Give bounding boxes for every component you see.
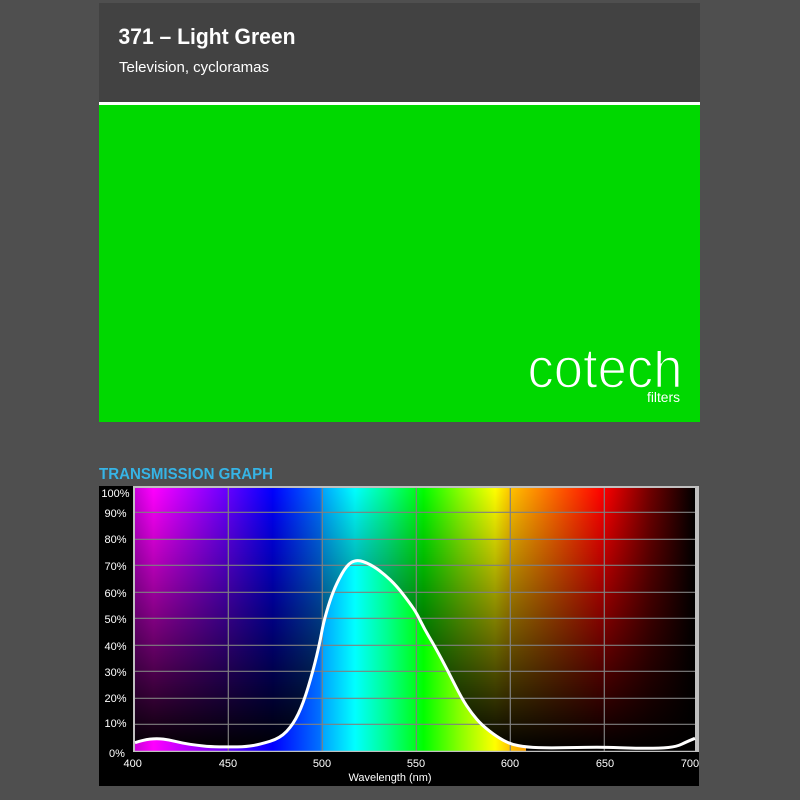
x axis labels: 600 bbox=[501, 758, 519, 770]
chart frame bbox=[133, 486, 699, 752]
logo: cotech filters: filters bbox=[647, 390, 680, 405]
y axis labels: 20% bbox=[104, 693, 127, 705]
title: 371 – Light Green bbox=[118, 24, 296, 49]
y axis labels: 0% bbox=[109, 748, 125, 760]
transmitted colour area under curve bbox=[135, 562, 526, 751]
header panel bbox=[99, 3, 700, 102]
section heading: transmission graph: TRANSMISSION GRAPH bbox=[99, 466, 273, 483]
y axis labels: 40% bbox=[104, 641, 127, 653]
x axis labels: 550 bbox=[407, 758, 425, 770]
y axis labels: 100% bbox=[101, 488, 130, 500]
y axis labels: 90% bbox=[104, 508, 127, 520]
transmission chart bbox=[99, 486, 699, 786]
logo: cotech filters: cotech bbox=[528, 336, 682, 400]
y axis labels: 70% bbox=[104, 561, 127, 573]
y axis labels bbox=[101, 488, 130, 760]
y axis labels: 60% bbox=[104, 588, 127, 600]
x axis labels: 500 bbox=[313, 758, 331, 770]
spectrum background bbox=[135, 488, 695, 751]
transmission curve bbox=[135, 561, 695, 748]
x axis labels bbox=[124, 758, 699, 770]
x axis labels: 450 bbox=[219, 758, 237, 770]
y axis labels: 10% bbox=[104, 718, 127, 730]
logo: cotech filters bbox=[530, 351, 680, 402]
subtitle: Television, cycloramas bbox=[119, 60, 269, 76]
x axis title: Wavelength (nm) bbox=[348, 772, 432, 784]
header underline bbox=[99, 102, 700, 105]
y axis labels: 30% bbox=[104, 667, 127, 679]
x axis labels: 700 bbox=[681, 758, 699, 770]
x axis labels: 400 bbox=[124, 758, 142, 770]
colour swatch panel bbox=[99, 105, 700, 422]
x axis labels: 650 bbox=[596, 758, 614, 770]
y axis labels: 50% bbox=[104, 614, 127, 626]
y axis labels: 80% bbox=[104, 534, 127, 546]
